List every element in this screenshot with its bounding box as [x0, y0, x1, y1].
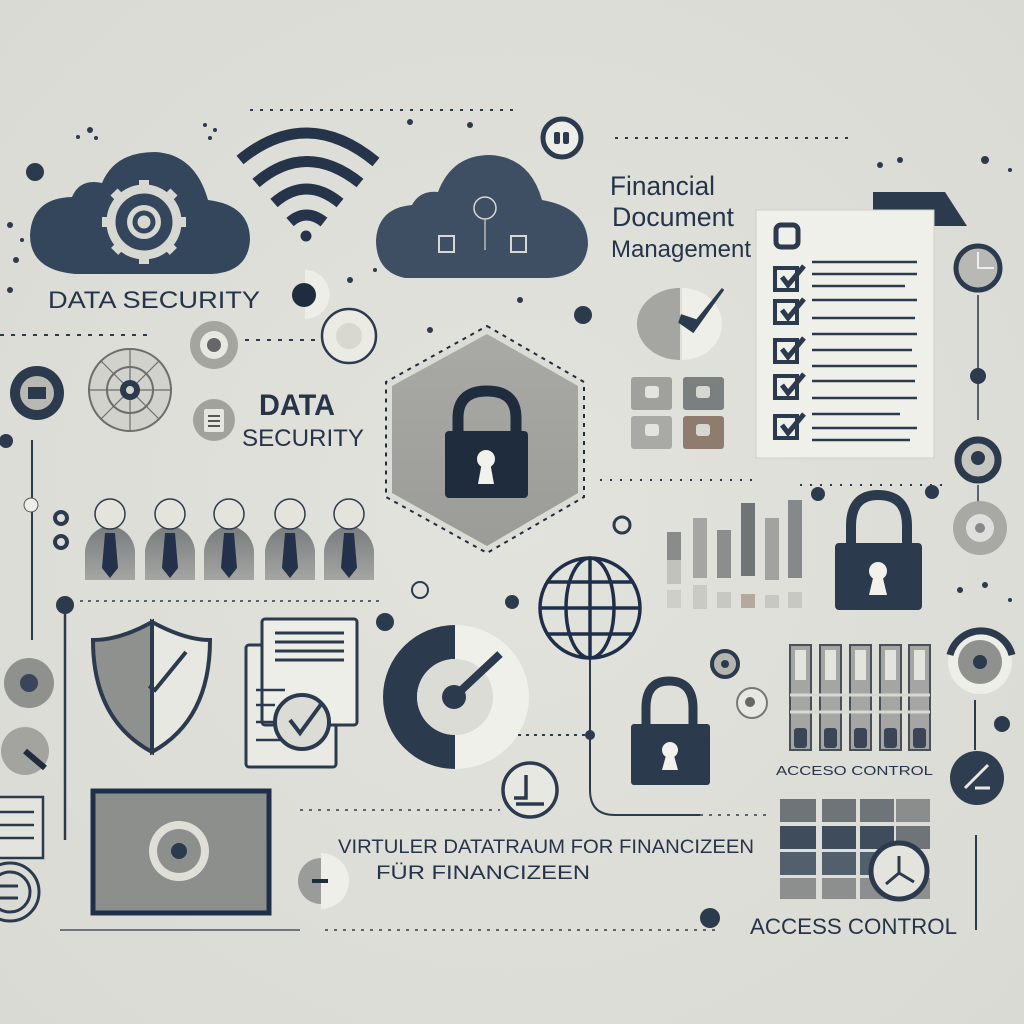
- icon: clock badge: [503, 763, 557, 817]
- label: access control: ACCESS CONTROL: [750, 914, 957, 939]
- icon: padlock lower centre: [631, 681, 710, 785]
- icon: clock over keypad: [871, 843, 927, 899]
- icon: small document tile: [193, 399, 235, 441]
- heading: data security: DATA SECURITY: [48, 287, 260, 314]
- text: data security centre: DATA: [259, 389, 335, 422]
- icon: row of business people: [85, 499, 374, 580]
- icon: ring top right of switches: [948, 630, 1012, 694]
- icon: left side document: [0, 797, 43, 858]
- text: virtual data room caption: FÜR FINANCIZEEN: [376, 863, 590, 884]
- icon: left gray disc: [4, 658, 54, 708]
- icon: compass wheel: [89, 349, 171, 431]
- icon: donut gauge with needle: [383, 625, 529, 769]
- icon: outlined ring: [322, 309, 376, 363]
- heading: financial document management: Management: [611, 236, 751, 263]
- icon: central hexagon padlock: [386, 326, 584, 553]
- icon: small hexagon: [737, 688, 767, 718]
- icon: small ring: [190, 321, 238, 369]
- icon: cloud with nodes: [376, 155, 588, 278]
- icon: checklist document: [756, 192, 967, 458]
- icon: access control switches: [790, 645, 930, 750]
- icon: wifi signal: [240, 133, 376, 240]
- icon: right side ring middle: [958, 440, 998, 480]
- icon: round badge: [543, 119, 581, 157]
- icon: keypad: [780, 799, 930, 899]
- icon: monitor with target: [93, 791, 269, 913]
- heading: financial document management: [610, 171, 751, 263]
- icon: left side ring: [0, 863, 39, 921]
- heading: financial document management: Financial: [610, 171, 715, 201]
- icon: status dot near wifi: [292, 270, 330, 319]
- text: virtual data room caption: VIRTULER DATATRAUM FOR FINANCIZEEN: [338, 837, 754, 858]
- icon: shield with check: [93, 622, 210, 752]
- icon: half disc beside monitor: [298, 853, 349, 909]
- icon: cloud with gear: [30, 152, 250, 274]
- icon: document with check seal: [246, 619, 357, 767]
- heading: financial document management: Document: [612, 202, 734, 232]
- icon: small ring near padlock: [712, 651, 738, 677]
- text: virtual data room caption: [338, 837, 754, 884]
- icon: four small tiles: [631, 377, 724, 449]
- text: data security centre: SECURITY: [242, 425, 364, 452]
- icon: left pale disc: [1, 727, 49, 775]
- icon: globe: [540, 558, 640, 658]
- icon: target ring left: [10, 366, 64, 420]
- background connector lines and dots: [0, 110, 978, 930]
- icon: dark circle check: [950, 751, 1004, 805]
- text: data security centre: [242, 389, 364, 452]
- icon: padlock right: [835, 495, 922, 610]
- icon: right side gray disc: [953, 501, 1007, 555]
- icon: right side ring top: [956, 246, 1000, 290]
- icon: bar chart: [667, 500, 802, 609]
- label: access control small: ACCESO CONTROL: [776, 764, 933, 778]
- icon: pie gauge with check: [637, 288, 723, 360]
